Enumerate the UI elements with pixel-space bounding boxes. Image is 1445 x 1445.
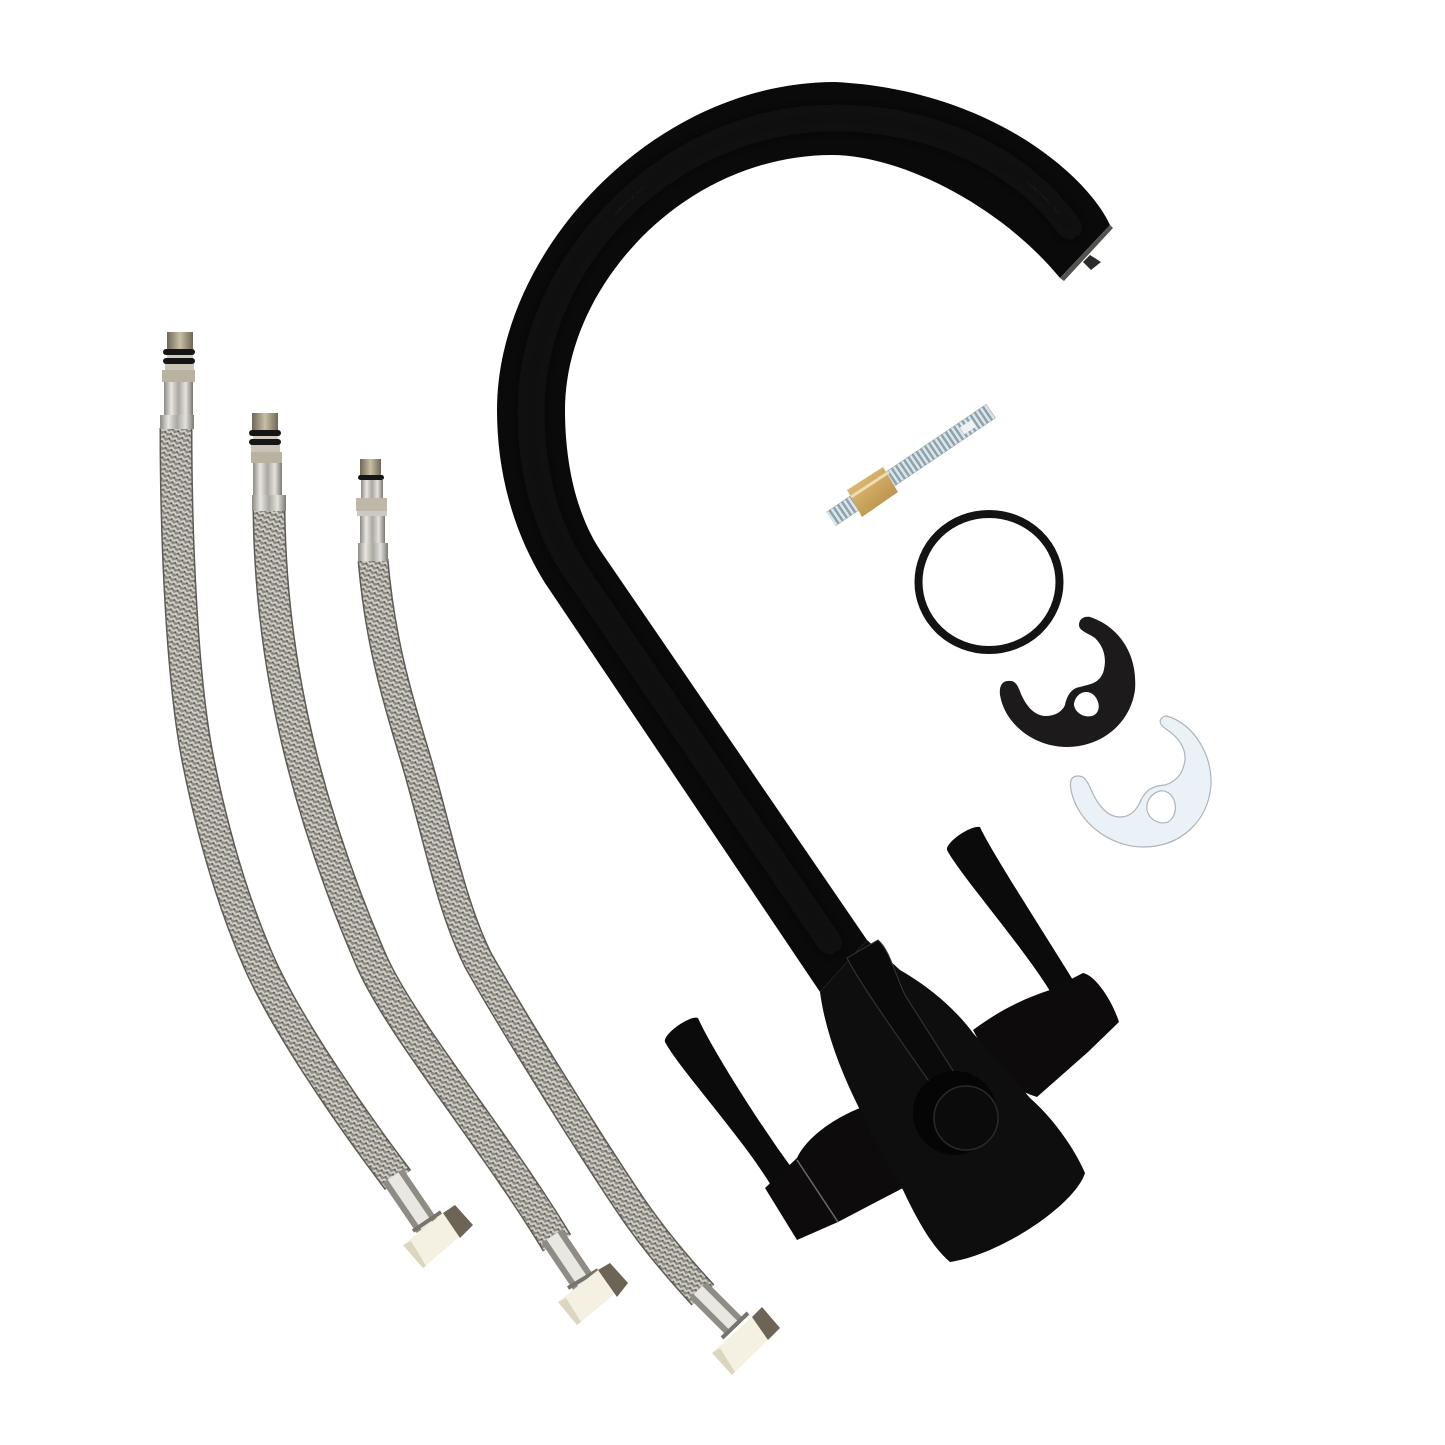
cap seam highlight	[797, 1160, 838, 1222]
black mounting washer	[1000, 617, 1135, 747]
knob	[913, 1071, 998, 1155]
middle lever	[847, 940, 957, 1097]
faucet	[497, 82, 1119, 1262]
right lever	[947, 827, 1076, 998]
spout	[497, 82, 1110, 992]
hose: long braided hose, left	[160, 332, 473, 1268]
hose: middle braided hose	[249, 413, 628, 1325]
silver mounting washer	[1070, 716, 1211, 847]
cone body	[820, 940, 1085, 1262]
hose: short braided hose, right	[356, 459, 780, 1375]
aerator tip	[1060, 225, 1113, 281]
left lever	[665, 1018, 795, 1192]
rubber o-ring	[918, 514, 1060, 650]
right arm and cap	[973, 973, 1119, 1097]
left arm and cap	[765, 1108, 903, 1240]
spout matte highlight	[531, 118, 1075, 950]
threaded stud with brass nut	[831, 411, 991, 519]
